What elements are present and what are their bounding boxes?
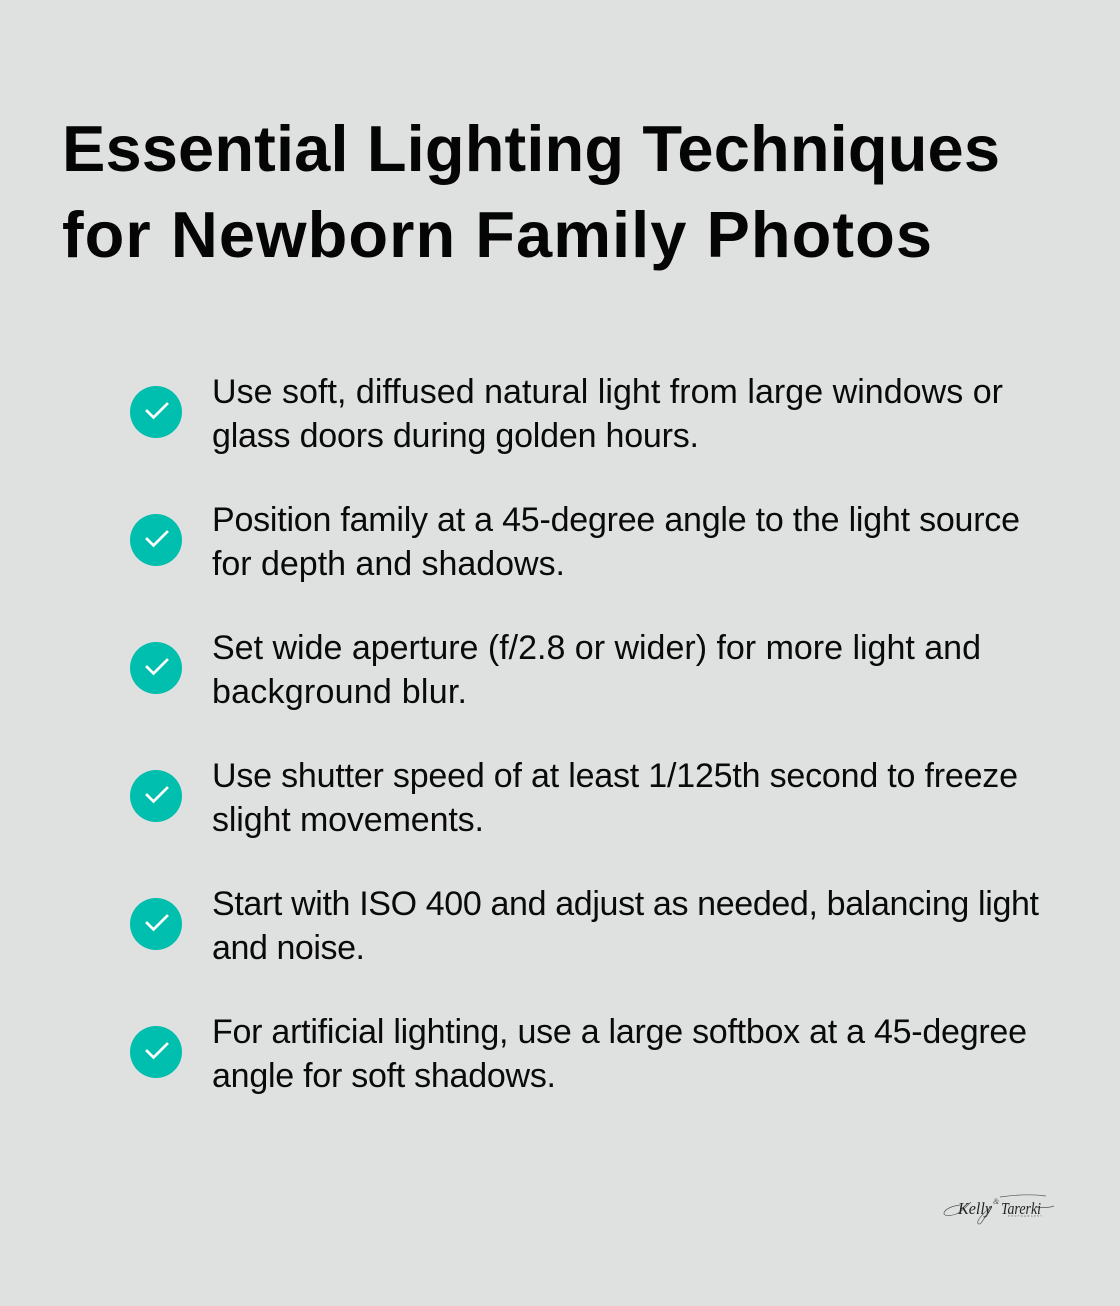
item 3 text: Set wide aperture (f/2.8 or wider) for more light and: [212, 629, 981, 667]
item 5 text: [212, 885, 1040, 967]
icon: check mark 5: [130, 898, 182, 950]
item 1: [130, 373, 1003, 455]
item 5: [130, 885, 1040, 967]
item 4 text: Use shutter speed of at least 1/125th second to freeze: [212, 757, 1018, 795]
item 6 text: For artificial lighting, use a large softbox at a 45-degree: [212, 1013, 1027, 1051]
item 2: [130, 501, 1020, 583]
item 4 text: [212, 757, 1018, 839]
item 4: [130, 757, 1018, 839]
item 1 text: [212, 373, 1003, 455]
icon: check mark 1: [130, 386, 182, 438]
item 3 text: background blur.: [212, 673, 467, 711]
item 1 text: glass doors during golden hours.: [212, 417, 699, 455]
item 6 text: angle for soft shadows.: [212, 1057, 556, 1095]
item 2 text: for depth and shadows.: [212, 545, 565, 583]
icon: check mark 3: [130, 642, 182, 694]
item 6: [130, 1013, 1027, 1095]
item 3 text: [212, 629, 981, 711]
logo: signature: Tarerki: [1001, 1199, 1041, 1218]
title: [62, 112, 1000, 271]
icon: check mark 4: [130, 770, 182, 822]
logo: signature: &: [993, 1197, 1000, 1206]
item 2 text: Position family at a 45-degree angle to the light source: [212, 501, 1020, 539]
logo: signature: [944, 1195, 1054, 1224]
item 5 text: Start with ISO 400 and adjust as needed, balancing light: [212, 885, 1040, 923]
item 3: [130, 629, 981, 711]
title: Essential Lighting Techniques: [62, 112, 1000, 185]
item 4 text: slight movements.: [212, 801, 484, 839]
item 5 text: and noise.: [212, 929, 365, 967]
logo: signature: PHOTOGRAPHY: [1008, 1215, 1042, 1218]
item 6 text: [212, 1013, 1027, 1095]
icon: check mark 6: [130, 1026, 182, 1078]
checklist: [130, 373, 1040, 1095]
item 1 text: Use soft, diffused natural light from large windows or: [212, 373, 1003, 411]
logo: signature: Kelly: [957, 1199, 992, 1218]
icon: check mark 2: [130, 514, 182, 566]
item 2 text: [212, 501, 1020, 583]
title: for Newborn Family Photos: [62, 198, 932, 271]
